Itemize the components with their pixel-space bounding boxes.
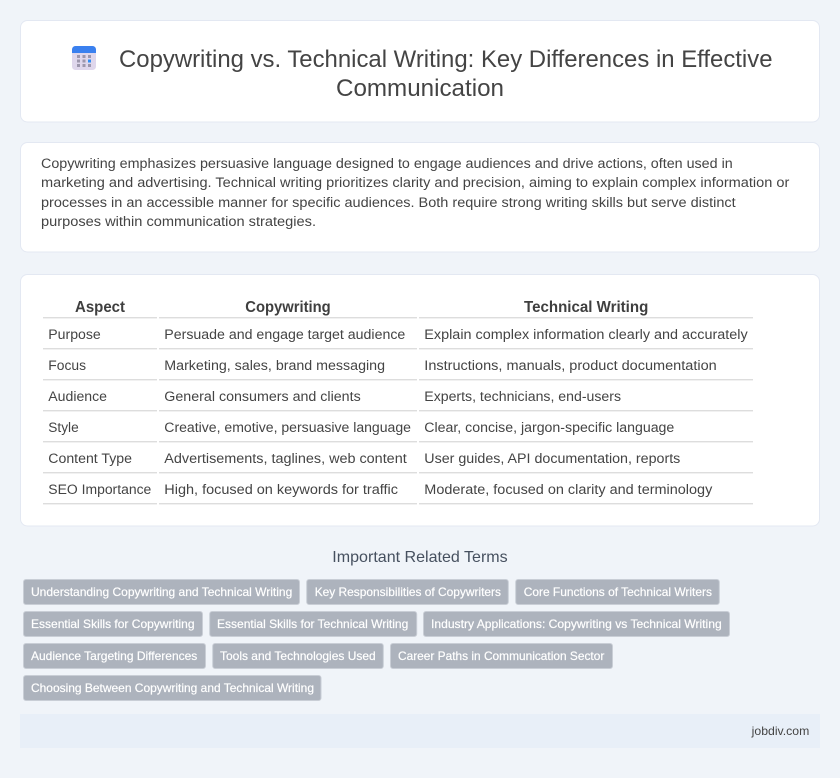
tag: Choosing Between Copywriting and Technical Writing: Choosing Between Copywriting and Technical Writing bbox=[31, 681, 314, 695]
table row: Content Type: User guides, API documentation, reports bbox=[424, 451, 680, 467]
tag: Career Paths in Communication Sector: Career Paths in Communication Sector bbox=[398, 649, 604, 663]
icon: calendar bbox=[72, 46, 96, 70]
table row: Content Type: Content Type bbox=[48, 451, 132, 467]
panel: description bbox=[20, 142, 820, 252]
panel: header bbox=[20, 20, 820, 122]
tag: Audience Targeting Differences bbox=[24, 644, 206, 668]
tag: Career Paths in Communication Sector bbox=[390, 644, 612, 668]
related term tags bbox=[24, 580, 730, 700]
table header row: Aspect bbox=[75, 299, 126, 316]
table row: SEO Importance: Moderate, focused on clarity and terminology bbox=[424, 482, 713, 498]
tag: Understanding Copywriting and Technical Writing bbox=[24, 580, 300, 604]
table header row: Copywriting bbox=[245, 299, 331, 316]
tag: Choosing Between Copywriting and Technical Writing bbox=[24, 676, 321, 700]
tag: Essential Skills for Copywriting: Essential Skills for Copywriting bbox=[31, 617, 194, 631]
table header row: Technical Writing bbox=[524, 299, 648, 316]
text block: introduction: purposes within communication strategies. bbox=[41, 214, 316, 230]
text block: introduction: processes in an accessible manner for specific audiences. Both require strong writing skills but serve distinct bbox=[41, 195, 736, 211]
table row: Focus bbox=[48, 358, 717, 374]
tag: Understanding Copywriting and Technical Writing: Understanding Copywriting and Technical Writing bbox=[31, 585, 292, 599]
table row: Purpose bbox=[48, 327, 749, 343]
tag: Industry Applications: Industry Applications: Copywriting vs Technical Writing bbox=[431, 617, 722, 631]
title: Communication bbox=[336, 75, 504, 102]
table row: SEO Importance: High, focused on keywords for traffic bbox=[164, 482, 398, 498]
heading: related terms: Important Related Terms bbox=[332, 549, 508, 566]
table row: Purpose: Persuade and engage target audience bbox=[164, 327, 405, 343]
tag: Key Responsibilities of Copywriters: Key Responsibilities of Copywriters bbox=[315, 585, 501, 599]
tag: Industry Applications bbox=[424, 612, 730, 636]
table row: Style: Clear, concise, jargon-specific language bbox=[424, 420, 674, 436]
table row: Purpose: Explain complex information clearly and accurately bbox=[424, 327, 749, 343]
tag: Key Responsibilities of Copywriters bbox=[307, 580, 508, 604]
title: Copywriting vs. Technical Writing: Key Differences in Effective bbox=[119, 46, 772, 73]
footer bbox=[20, 714, 820, 748]
table row: Content Type bbox=[48, 451, 680, 467]
tag: Core Functions of Technical Writers: Core Functions of Technical Writers bbox=[524, 585, 712, 599]
table row: Audience: Audience bbox=[48, 389, 107, 405]
tag: Tools and Technologies Used bbox=[213, 644, 383, 668]
text block: introduction: Copywriting emphasizes persuasive language designed to engage audiences and drive actions, often used in bbox=[41, 156, 733, 172]
tag: Essential Skills for Technical Writing bbox=[210, 612, 417, 636]
table row: SEO Importance: SEO Importance bbox=[48, 482, 151, 498]
tag: Essential Skills for Technical Writing: Essential Skills for Technical Writing bbox=[217, 617, 408, 631]
table row: Style bbox=[48, 420, 674, 436]
panel: comparison table bbox=[20, 274, 820, 526]
tag: Essential Skills for Copywriting bbox=[24, 612, 202, 636]
table row: Focus: Marketing, sales, brand messaging bbox=[164, 358, 385, 374]
table row: Style: Creative, emotive, persuasive language bbox=[164, 420, 411, 436]
text block: introduction bbox=[41, 156, 790, 230]
table row: Audience: Experts, technicians, end-users bbox=[424, 389, 621, 405]
tag: Core Functions of Technical Writers bbox=[516, 580, 719, 604]
table row: Focus: Instructions, manuals, product documentation bbox=[424, 358, 717, 374]
tag: Audience Targeting Differences: Audience Targeting Differences bbox=[31, 649, 197, 663]
table header row bbox=[75, 299, 648, 316]
text block: introduction: marketing and advertising. Technical writing prioritizes clarity and precision, aiming to explain complex information or bbox=[41, 175, 790, 191]
title bbox=[119, 46, 772, 102]
table row: Purpose: Purpose bbox=[48, 327, 101, 343]
footer: source: jobdiv.com bbox=[751, 724, 809, 738]
table row: Style: Style bbox=[48, 420, 79, 436]
table row: Content Type: Advertisements, taglines, web content bbox=[164, 451, 407, 467]
tag: Tools and Technologies Used: Tools and Technologies Used bbox=[220, 649, 376, 663]
table row: Audience bbox=[48, 389, 621, 405]
table row: Audience: General consumers and clients bbox=[164, 389, 361, 405]
table row: Focus: Focus bbox=[48, 358, 86, 374]
table row: SEO Importance bbox=[48, 482, 713, 498]
